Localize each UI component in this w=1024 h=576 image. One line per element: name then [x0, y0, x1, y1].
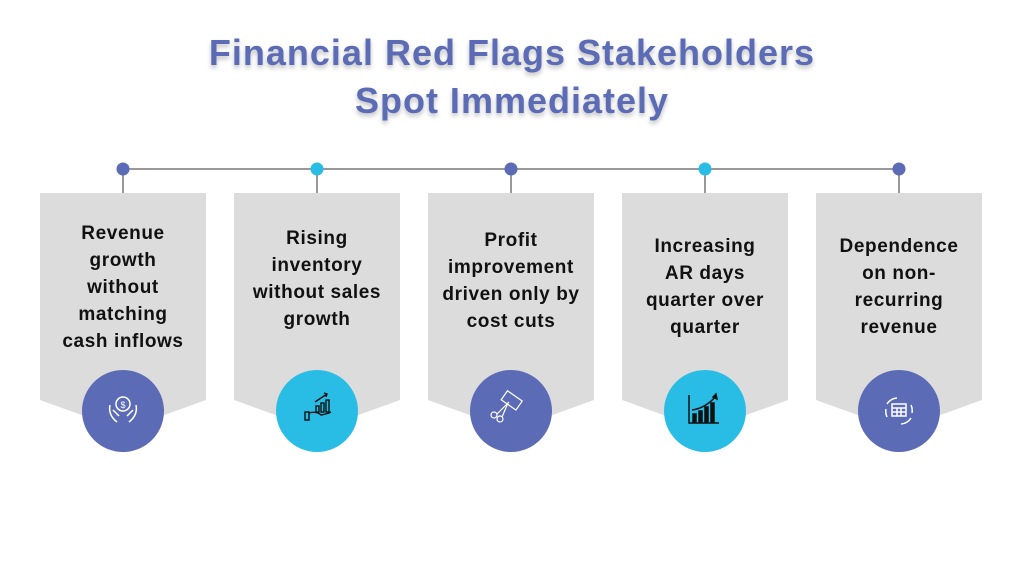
text: card 1: matching: [78, 304, 168, 325]
card 5: [816, 162, 982, 452]
text: card 5: Dependence: [840, 236, 958, 257]
timeline line: [123, 168, 899, 170]
text: card 5: [840, 236, 958, 338]
text: card 3: improvement: [448, 257, 574, 278]
card 1: [40, 162, 206, 452]
icon: scissors cutting bill: [491, 391, 522, 422]
text: card 2: growth: [284, 309, 350, 330]
card 3: [428, 162, 594, 452]
title: Spot Immediately: [355, 80, 669, 121]
icon: growth chart: [689, 394, 719, 423]
text: card 1: without: [87, 277, 159, 298]
icon: hand with rising bars: [305, 393, 331, 420]
text: card 3: driven only by: [442, 284, 580, 305]
text: card 5: revenue: [860, 317, 938, 338]
text: card 1: cash inflows: [62, 331, 184, 352]
text: card 3: cost cuts: [467, 311, 555, 332]
title: [208, 32, 815, 126]
text: card 4: quarter over: [646, 290, 764, 311]
text: card 2: without sales: [253, 282, 381, 303]
text: card 2: Rising: [286, 228, 348, 249]
text: card 2: [252, 228, 381, 330]
text: card 5: on non-: [862, 263, 936, 284]
text: card 3: [442, 230, 580, 332]
text: card 4: Increasing: [654, 236, 756, 257]
text: card 4: [646, 236, 764, 338]
text: card 5: recurring: [855, 290, 943, 311]
icon: hands with coin: [110, 397, 136, 422]
icon: hands with coin: $: [120, 400, 126, 410]
card 2: [234, 162, 400, 452]
text: card 1: [62, 223, 184, 352]
text: card 1: Revenue: [81, 223, 165, 244]
text: card 3: Profit: [484, 230, 538, 251]
title: Financial Red Flags Stakeholders: [209, 32, 815, 73]
icon: recurring calendar: [886, 398, 912, 424]
text: card 2: inventory: [272, 255, 362, 276]
card 4: [622, 162, 788, 452]
text: card 4: AR days: [665, 263, 745, 284]
text: card 1: growth: [90, 250, 156, 271]
text: card 4: quarter: [670, 317, 740, 338]
